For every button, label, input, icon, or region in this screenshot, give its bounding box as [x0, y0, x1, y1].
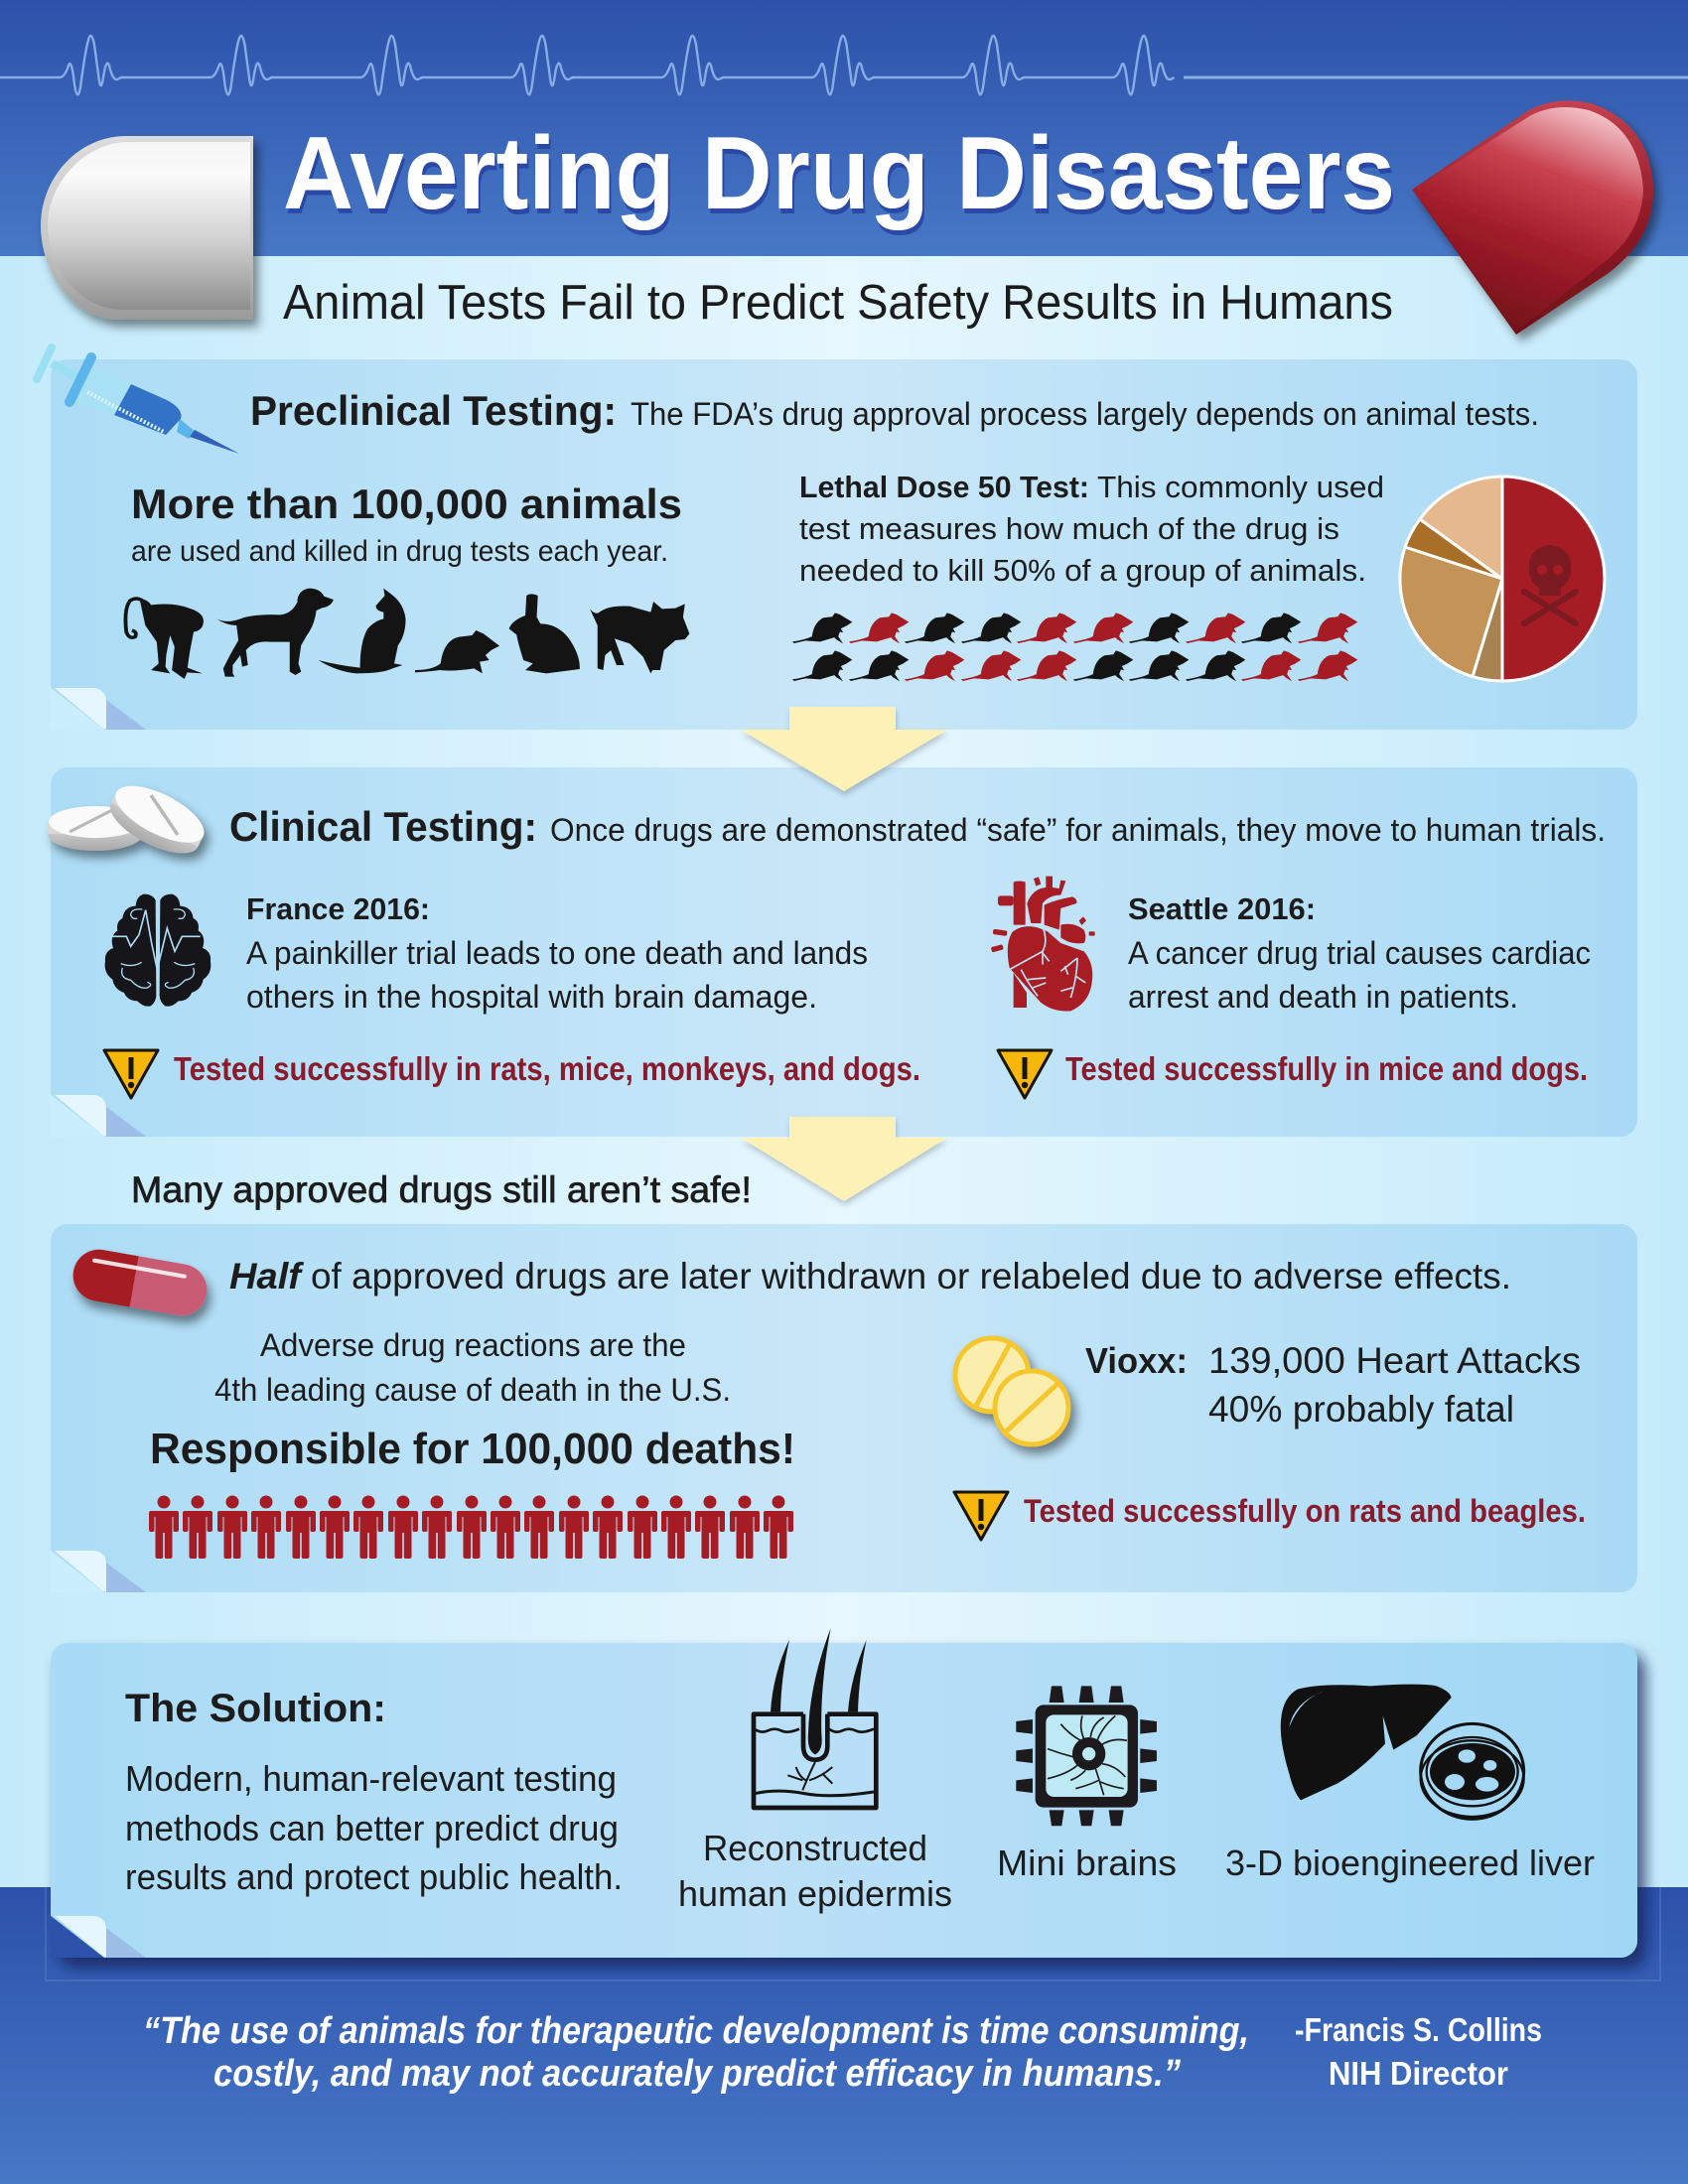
page fold corner — [50, 1915, 146, 1958]
icon: cat — [318, 589, 406, 673]
icon: brain — [105, 894, 211, 1007]
adverse reactions text: 4th leading cause of death in the U.S. — [214, 1372, 731, 1408]
quote: costly, and may not accurately predict efficacy in humans.” — [213, 2053, 1181, 2095]
arrow: clinical to approved — [741, 1117, 947, 1201]
icon: rat — [415, 630, 499, 673]
heading: half of approved drugs: of approved drugs are later withdrawn or relabeled due to adverse effects. — [311, 1256, 1511, 1297]
page fold corner — [50, 687, 146, 730]
panel: clinical testing — [48, 767, 1637, 1137]
quote attribution: NIH Director — [1329, 2055, 1508, 2092]
label: mini brains: Mini brains — [997, 1843, 1177, 1883]
label: reconstructed human epidermis: human epidermis — [678, 1873, 952, 1914]
warning: France: Tested successfully in rats, mice, monkeys, and dogs. — [174, 1050, 920, 1087]
page fold corner — [50, 1550, 146, 1592]
warning: Seattle — [998, 1050, 1588, 1098]
quote: “The use of animals for therapeutic development is time consuming, — [143, 2010, 1249, 2052]
case: France 2016 — [246, 891, 868, 1015]
warning: Vioxx: Tested successfully on rats and beagles. — [1024, 1493, 1586, 1529]
case: France 2016: A painkiller trial leads to one death and lands — [246, 935, 868, 971]
case: Seattle 2016: Seattle 2016: — [1128, 891, 1316, 926]
stat: responsible for 100,000 deaths: Responsible for 100,000 deaths! — [150, 1425, 795, 1473]
icon: white pill — [41, 136, 253, 320]
solution text: results and protect public health. — [125, 1856, 623, 1897]
LD50 description — [799, 470, 1384, 588]
solution text — [125, 1758, 623, 1897]
subtitle: Animal Tests Fail to Predict Safety Results in Humans — [283, 276, 1393, 330]
icon: white tablets — [48, 774, 212, 865]
icon: monkey — [125, 599, 204, 679]
heading: clinical testing: Clinical Testing: — [229, 803, 537, 850]
intro text: The FDA’s drug approval process largely depends on animal tests. — [631, 396, 1539, 432]
Vioxx stats: 139,000 Heart Attacks — [1208, 1340, 1581, 1381]
panel: approved drugs — [50, 1224, 1637, 1592]
rat pictogram: 50% killed — [792, 613, 1357, 681]
warning: Vioxx — [954, 1492, 1586, 1540]
icon: heart — [991, 877, 1095, 1012]
icon: chip with neuron — [1016, 1686, 1157, 1826]
icon: skull and crossbones — [1524, 545, 1576, 623]
stat: more than 100,000 animals: More than 100,000 animals — [131, 480, 682, 527]
LD50 description: needed to kill 50% of a group of animals. — [799, 553, 1366, 588]
icon: skin with hairs — [754, 1628, 876, 1808]
ECG heartbeat line — [0, 36, 1688, 94]
panel: the solution — [50, 1628, 1637, 1958]
icon: rabbit — [509, 594, 580, 673]
warning: France — [104, 1050, 920, 1098]
pie chart with skull — [1400, 477, 1605, 681]
Vioxx stats — [1085, 1340, 1581, 1430]
label: reconstructed human epidermis: Reconstructed — [703, 1828, 927, 1868]
arrow: preclinical to clinical — [741, 707, 947, 791]
label: reconstructed human epidermis — [678, 1828, 952, 1914]
case: Seattle 2016 — [1128, 891, 1591, 1015]
solution text: Modern, human-relevant testing — [125, 1758, 617, 1799]
icon: red capsule — [70, 1246, 211, 1319]
Vioxx stats: 40% probably fatal — [1208, 1389, 1514, 1430]
animal silhouettes — [125, 589, 689, 679]
quote attribution: -Francis S. Collins — [1295, 2011, 1542, 2048]
solution text: methods can better predict drug — [125, 1808, 619, 1848]
icon: liver and petri dish — [1281, 1685, 1524, 1819]
heading: the solution: The Solution: — [125, 1687, 386, 1730]
heading: preclinical testing: Preclinical Testing: — [250, 387, 617, 434]
panel: preclinical testing — [37, 347, 1637, 730]
case: France 2016: others in the hospital with brain damage. — [246, 979, 817, 1015]
case: Seattle 2016: arrest and death in patients. — [1128, 979, 1518, 1015]
stat caption: are used and killed in drug tests each year. — [131, 535, 668, 568]
icon: pig — [590, 602, 689, 673]
icon: dog — [216, 589, 334, 677]
icon: red pill — [1412, 100, 1653, 335]
adverse reactions text: Adverse drug reactions are the — [260, 1327, 686, 1363]
people pictogram — [149, 1495, 793, 1559]
icon: yellow tablets — [955, 1338, 1068, 1444]
page fold corner — [50, 1094, 146, 1137]
warning: Seattle: Tested successfully in mice and dogs. — [1065, 1050, 1588, 1087]
callout: many approved drugs: Many approved drugs still aren’t safe! — [131, 1169, 752, 1210]
LD50 description: This commonly used — [1097, 470, 1384, 504]
heading: half of approved drugs: Half — [229, 1256, 305, 1297]
Vioxx stats: Vioxx: — [1085, 1340, 1188, 1381]
LD50 description: Lethal Dose 50 Test: — [799, 470, 1089, 504]
quote attribution — [1295, 2011, 1542, 2092]
LD50 description: test measures how much of the drug is — [799, 511, 1339, 546]
quote — [143, 2010, 1249, 2095]
adverse reactions text — [214, 1327, 731, 1408]
case: Seattle 2016: A cancer drug trial causes cardiac — [1128, 935, 1591, 971]
case: France 2016: France 2016: — [246, 891, 430, 926]
intro text: Once drugs are demonstrated “safe” for animals, they move to human trials. — [550, 812, 1606, 848]
label: 3-D bioengineered liver: 3-D bioengineered liver — [1225, 1843, 1595, 1883]
icon: syringe — [37, 347, 239, 454]
title: Averting Drug Disasters — [283, 116, 1395, 231]
